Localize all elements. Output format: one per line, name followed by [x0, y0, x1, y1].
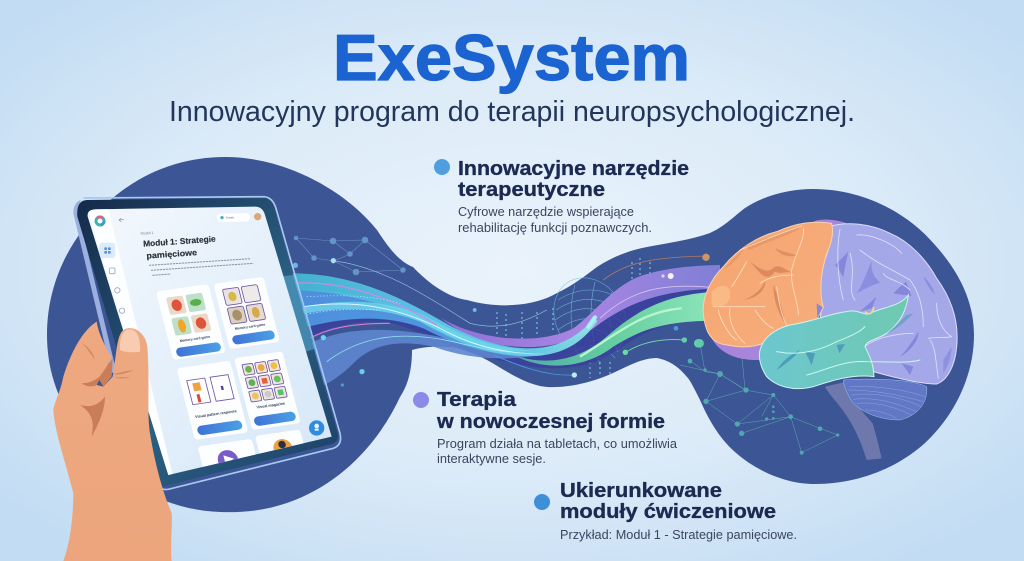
avatar [254, 213, 261, 220]
finger crease shadows [80, 343, 134, 437]
tablet outer glass edge [83, 197, 341, 490]
card: memory game fruit [156, 284, 226, 360]
brain [703, 220, 957, 460]
data digits columns [497, 258, 650, 378]
bullet dot [413, 392, 429, 408]
title: ExeSystem [333, 21, 690, 94]
screen content [88, 209, 324, 487]
heading: Ukierunkowane [560, 479, 722, 502]
ribbon: bright cyan core [290, 302, 533, 351]
purple top sliver [813, 220, 847, 237]
heading [436, 388, 665, 433]
module label: Moduł 1 [141, 231, 154, 236]
bullet: modern therapy [413, 388, 677, 466]
ribbon highlights [290, 256, 720, 375]
card: video [198, 439, 256, 467]
module description lines [149, 259, 253, 275]
search pill [217, 213, 250, 222]
floating help button [309, 420, 324, 436]
network nodes [682, 337, 839, 455]
subtitle: Innowacyjny program do terapii neuropsychologicznej. [169, 96, 855, 128]
module title [143, 234, 216, 261]
bullet dot [534, 494, 550, 510]
purple under lobe [712, 333, 767, 360]
description: rehabilitację funkcji poznawczych. [458, 221, 652, 235]
card: visual pattern [177, 361, 248, 440]
orange node [702, 254, 710, 261]
card: visual grid [234, 351, 301, 430]
back arrow [119, 218, 124, 222]
heading: w nowoczesnej formie [436, 410, 665, 433]
flowing data ribbons [280, 256, 720, 387]
hand [53, 322, 172, 561]
heading: moduły ćwiczeniowe [560, 500, 776, 523]
glowing nodes on ribbons [293, 258, 703, 387]
search pill: Kontakt [226, 217, 234, 220]
ribbon: green lower right [513, 292, 720, 366]
description: Przykład: Moduł 1 - Strategie pamięciowe. [560, 528, 797, 542]
tablet bezel [77, 198, 338, 486]
brain stem [825, 382, 882, 460]
sidebar icons [99, 242, 126, 314]
sidebar [88, 209, 173, 477]
description [458, 205, 652, 235]
heading: Innowacyjne narzędzie [458, 157, 689, 180]
frontal lobe [703, 222, 833, 347]
bullet: targeted modules [534, 479, 797, 542]
temporal lobe [759, 295, 908, 389]
frontal lobe folds [723, 227, 823, 323]
heading [458, 157, 689, 201]
description: interaktywne sesje. [437, 452, 546, 466]
neural network lines near tablet [294, 236, 406, 275]
heading: terapeutyczne [458, 178, 605, 201]
description [437, 437, 677, 466]
tablet screen [88, 207, 332, 475]
app logo [96, 217, 104, 225]
ribbon: purple upper right [440, 265, 720, 347]
bullet: innovative tool [434, 157, 689, 235]
small wireframe brain globe [540, 265, 640, 371]
module title: pamięciowe [146, 247, 198, 261]
bullet dot [434, 159, 450, 175]
heading [560, 479, 776, 523]
ribbon: dark indigo band [280, 268, 720, 368]
card: visual pattern: Visual pattern response [195, 409, 237, 419]
card: memory game cards [213, 277, 280, 349]
card: memory game cards: Memory card game [234, 323, 266, 331]
tablet side edge [73, 200, 116, 373]
module title: Moduł 1: Strategie [143, 234, 216, 249]
fingers behind tablet [53, 322, 172, 561]
tablet with hand [53, 197, 341, 561]
ribbon: lower pale blue [303, 330, 540, 387]
purple lobe folds [835, 252, 952, 375]
parietal and occipital lobe [820, 224, 957, 384]
card: visual grid: Visual magazine [256, 401, 286, 410]
description: Cyfrowe narzędzie wspierające [458, 205, 634, 219]
neural network near brain [680, 254, 839, 455]
ribbon: teal top [283, 273, 597, 356]
description: Program działa na tabletach, co umożliwia [437, 437, 677, 451]
card: person [256, 430, 304, 454]
dark blue blob connecting tablet and brain [47, 157, 974, 512]
ribbon: mid blue [287, 290, 540, 355]
card: memory game fruit: Memory card game [179, 335, 211, 343]
cerebellum [843, 379, 927, 420]
heading: Terapia [437, 388, 517, 411]
ribbon glow through right bezel [278, 275, 317, 354]
thumb nail [120, 329, 140, 352]
